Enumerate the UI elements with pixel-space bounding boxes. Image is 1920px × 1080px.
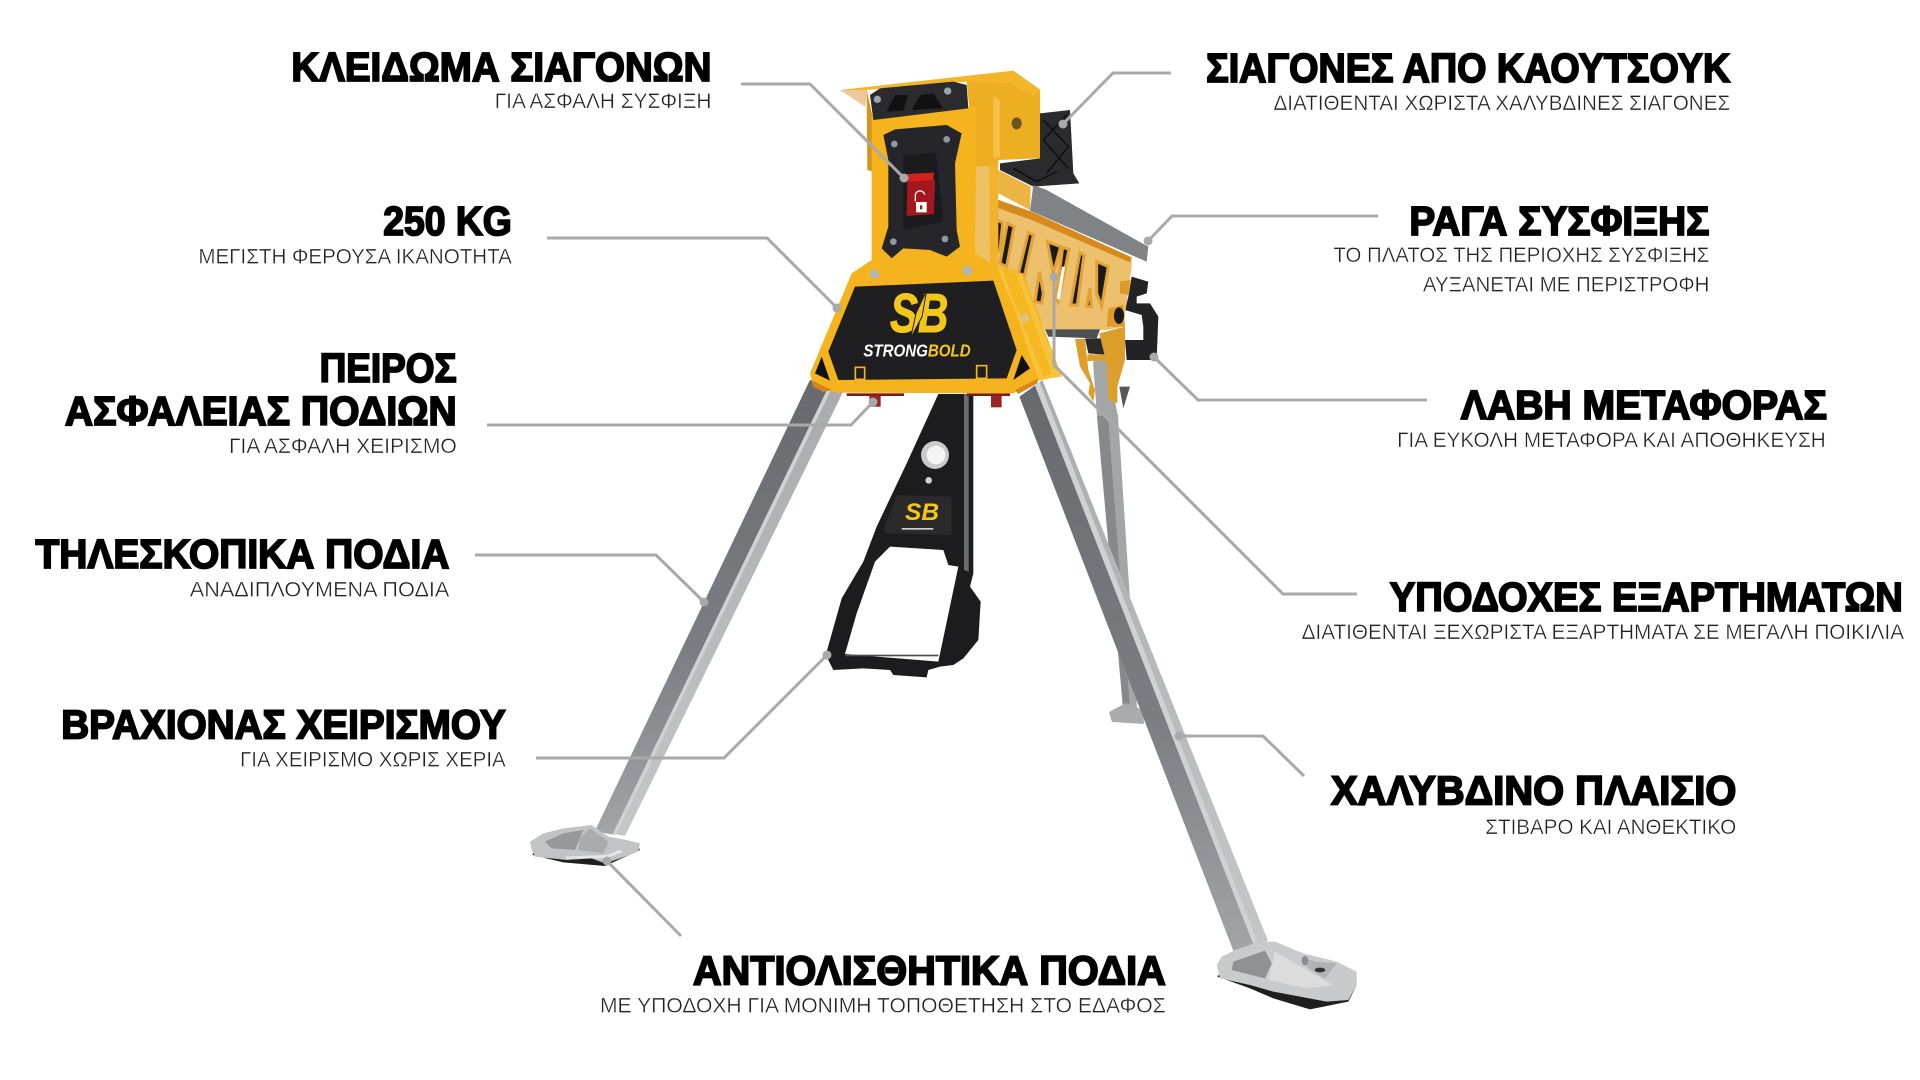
label: clamping rail: ΡΑΓΑ ΣΥΣΦΙΞΗΣ xyxy=(1409,198,1709,244)
label: jaw lock: ΓΙΑ ΑΣΦΑΛΗ ΣΥΣΦΙΞΗ xyxy=(495,89,711,113)
legs xyxy=(595,380,1268,951)
rear beam, handle and brackets xyxy=(980,193,1158,410)
line: accessory sockets xyxy=(1050,272,1357,594)
rubber jaw rear xyxy=(1000,110,1079,187)
label: clamping rail: ΤΟ ΠΛΑΤΟΣ ΤΗΣ ΠΕΡΙΟΧΗΣ ΣΥΣΦΙΞΗΣ xyxy=(1333,243,1709,267)
logo mark: SB xyxy=(890,282,948,344)
line: carrying handle xyxy=(1150,352,1427,400)
yellow block xyxy=(998,170,1031,210)
label: carrying handle: ΓΙΑ ΕΥΚΟΛΗ ΜΕΤΑΦΟΡΑ ΚΑΙ ΑΠΟΘΗΚΕΥΣΗ xyxy=(1397,428,1826,452)
red lever xyxy=(907,180,935,216)
label: rubber jaws xyxy=(1206,45,1731,115)
line: jaw lock xyxy=(741,84,908,182)
beam body xyxy=(980,193,1132,330)
label: safety pin: ΓΙΑ ΑΣΦΑΛΗ ΧΕΙΡΙΣΜΟ xyxy=(229,434,457,458)
label: clamping rail: ΑΥΞΑΝΕΤΑΙ ΜΕ ΠΕΡΙΣΤΡΟΦΗ xyxy=(1423,272,1709,296)
lower brackets xyxy=(1075,327,1130,410)
label: telescopic legs: ΤΗΛΕΣΚΟΠΙΚΑ ΠΟΔΙΑ xyxy=(36,531,449,577)
label: anti-slip feet xyxy=(600,947,1166,1018)
bench head xyxy=(810,71,1148,394)
label: operating arm: ΓΙΑ ΧΕΙΡΙΣΜΟ ΧΩΡΙΣ ΧΕΡΙΑ xyxy=(240,748,506,772)
label: jaw lock xyxy=(291,44,711,113)
label: steel frame: ΣΤΙΒΑΡΟ ΚΑΙ ΑΝΘΕΚΤΙΚΟ xyxy=(1485,815,1736,839)
carrying handle xyxy=(1125,277,1158,360)
label: 250 kg: ΜΕΓΙΣΤΗ ΦΕΡΟΥΣΑ ΙΚΑΝΟΤΗΤΑ xyxy=(198,244,513,268)
joint caps xyxy=(812,378,1038,394)
label: 250 kg xyxy=(198,198,513,268)
label: 250 kg: 250 KG xyxy=(383,198,512,244)
label: telescopic legs: ΑΝΑΔΙΠΛΟΥΜΕΝΑ ΠΟΔΙΑ xyxy=(190,577,450,601)
front column and base xyxy=(810,107,1062,393)
beam cut-outs xyxy=(996,220,1108,307)
icon: open padlock xyxy=(915,191,927,212)
top rubber jaw xyxy=(870,82,968,120)
black logo panel xyxy=(828,281,1017,380)
line: safety pin xyxy=(487,398,878,425)
left anti-slip foot xyxy=(530,825,640,866)
label: telescopic legs xyxy=(36,531,450,601)
line: rubber jaws xyxy=(1058,73,1171,128)
jaw lock plate xyxy=(882,125,962,258)
label: steel frame: ΧΑΛΥΒΔΙΝΟ ΠΛΑΙΣΙΟ xyxy=(1331,767,1736,813)
line: telescopic legs xyxy=(475,555,708,606)
corner pads xyxy=(815,355,1030,381)
label: safety pin: ΠΕΙΡΟΣ xyxy=(320,345,457,391)
right leg xyxy=(1019,380,1268,951)
label: steel frame xyxy=(1331,767,1736,839)
label: anti-slip feet: ΑΝΤΙΟΛΙΣΘΗΤΙΚΑ ΠΟΔΙΑ xyxy=(693,947,1166,993)
label: operating arm: ΒΡΑΧΙΟΝΑΣ ΧΕΙΡΙΣΜΟΥ xyxy=(61,701,506,747)
left leg xyxy=(595,380,843,836)
label: carrying handle xyxy=(1397,382,1827,452)
label: clamping rail xyxy=(1333,198,1709,296)
callout lines xyxy=(475,73,1427,936)
line: clamping rail xyxy=(1144,216,1378,246)
label: accessory sockets: ΔΙΑΤΙΘΕΝΤΑΙ ΞΕΧΩΡΙΣΤΑ ΕΞΑΡΤΗΜΑΤΑ ΣΕ ΜΕΓΑΛΗ ΠΟΙΚΙΛΙΑ xyxy=(1302,620,1905,644)
back leg xyxy=(1093,362,1144,724)
side fold xyxy=(867,90,873,172)
small marks xyxy=(855,366,987,379)
label: safety pin: ΑΣΦΑΛΕΙΑΣ ΠΟΔΙΩΝ xyxy=(65,388,457,434)
line: anti-slip feet xyxy=(602,856,681,936)
line: steel frame xyxy=(1174,732,1304,776)
clamping rail xyxy=(1030,185,1148,262)
label: jaw lock: ΚΛΕΙΔΩΜΑ ΣΙΑΓΟΝΩΝ xyxy=(291,44,711,90)
side plate of base xyxy=(997,267,1062,379)
label: carrying handle: ΛΑΒΗ ΜΕΤΑΦΟΡΑΣ xyxy=(1461,382,1827,428)
line: 250 kg xyxy=(547,238,842,312)
label: operating arm xyxy=(61,701,506,772)
orange patches and knob xyxy=(1120,280,1131,295)
label: anti-slip feet: ΜΕ ΥΠΟΔΟΧΗ ΓΙΑ ΜΟΝΙΜΗ ΤΟΠΟΘΕΤΗΣΗ ΣΤΟ ΕΔΑΦΟΣ xyxy=(600,994,1166,1018)
steel cross bar xyxy=(1045,329,1100,338)
upper housing side xyxy=(967,72,1040,167)
label: rubber jaws: ΣΙΑΓΟΝΕΣ ΑΠΟ ΚΑΟΥΤΣΟΥΚ xyxy=(1206,45,1731,91)
label: accessory sockets xyxy=(1302,574,1905,644)
right anti-slip foot xyxy=(1217,942,1357,1009)
label: rubber jaws: ΔΙΑΤΙΘΕΝΤΑΙ ΧΩΡΙΣΤΑ ΧΑΛΥΒΔΙΝΕΣ ΣΙΑΓΟΝΕΣ xyxy=(1273,91,1730,115)
operating arm xyxy=(827,393,1010,677)
top plate xyxy=(840,71,1041,107)
line: operating arm xyxy=(536,650,832,758)
column side strips xyxy=(975,162,998,270)
logo on operating arm: SB xyxy=(905,499,939,526)
brand name: STRONGBOLD xyxy=(863,341,971,361)
bolts xyxy=(870,266,972,279)
safety pins xyxy=(847,393,1010,407)
label: safety pin xyxy=(65,345,457,458)
